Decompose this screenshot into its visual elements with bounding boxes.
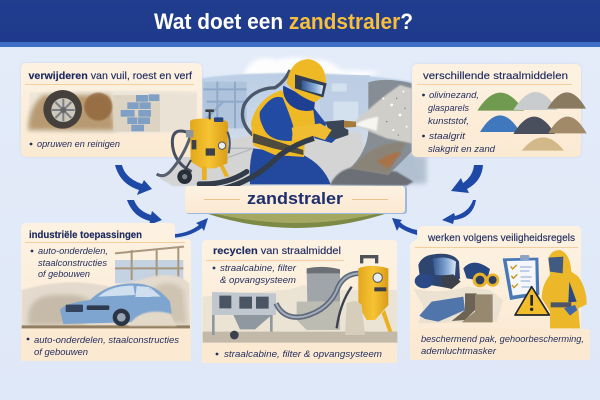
text top: straalcabine, filter <box>220 263 297 274</box>
central scene: worker sandblasting <box>160 57 427 191</box>
title: Wat doet een zandstraler? <box>154 9 413 34</box>
scene backdrop <box>160 57 427 186</box>
arrow: lower left panel to center <box>163 218 208 238</box>
metal sheet and spray <box>330 80 413 186</box>
ear defenders <box>463 263 490 282</box>
panel: recyclen <box>202 240 397 363</box>
illustration: recycling equipment <box>203 257 397 343</box>
list: staalgrit <box>429 131 465 142</box>
full face mask <box>418 254 460 288</box>
list: slakgrit en zand <box>428 144 496 155</box>
boots <box>452 293 477 321</box>
gun <box>325 120 348 139</box>
text bottom: of gebouwen <box>34 347 88 358</box>
glove <box>292 123 332 140</box>
illustration: safety gear <box>413 250 587 328</box>
icon: abrasive piles <box>477 92 587 151</box>
heading: verwijderen van vuil, roest en verf <box>28 70 192 82</box>
text top <box>31 246 108 280</box>
text bottom: ademluchtmasker <box>421 346 497 357</box>
arrow: safety panel to center <box>442 200 476 224</box>
center label: zandstraler: zandstraler <box>247 189 343 208</box>
header banner <box>0 0 600 47</box>
arrow: center to lower left panel <box>127 200 162 225</box>
text bottom <box>421 334 584 357</box>
list: kunststof, <box>428 116 469 127</box>
arrow: right panel to center <box>392 218 417 235</box>
center label: zandstraler <box>185 186 407 228</box>
warning sign <box>515 287 549 315</box>
panel: verschillende straalmiddelen <box>412 64 587 157</box>
worker <box>207 59 356 191</box>
text bottom <box>27 335 179 358</box>
text top: staalconstructies <box>38 258 107 269</box>
legs <box>250 148 331 184</box>
arrow: top right to center <box>451 165 483 193</box>
heading: industriële toepassingen <box>29 229 142 241</box>
list: olivinezand, <box>429 90 479 101</box>
clipboard <box>503 258 539 300</box>
arrow: top left to center <box>115 165 152 195</box>
list <box>422 90 496 155</box>
text bottom: auto-onderdelen, staalconstructies <box>34 335 179 346</box>
heading: verschillende straalmiddelen <box>423 70 568 82</box>
blue back and right arm <box>305 105 337 143</box>
illustration: tire and brick wall <box>27 90 197 133</box>
panel: verwijderen <box>21 63 202 157</box>
heading: werken volgens veiligheidsregels <box>427 232 575 244</box>
text bottom: straalcabine, filter & opvangsysteem <box>224 349 382 360</box>
text top: auto-onderdelen, <box>38 246 108 257</box>
belt <box>253 133 303 155</box>
text top: of gebouwen <box>38 269 90 280</box>
heading: recyclen van straalmiddel <box>213 245 341 257</box>
panel: veiligheidsregels <box>410 226 590 360</box>
text bottom: beschermend pak, gehoorbescherming, <box>421 334 584 345</box>
blast pot machine <box>157 109 247 184</box>
text top <box>213 263 297 286</box>
hood <box>283 86 315 111</box>
hose <box>207 138 314 191</box>
bullet <box>30 143 32 145</box>
gloves <box>419 297 465 322</box>
vest <box>251 90 315 157</box>
list: glasparels <box>428 103 469 114</box>
illustration: car in dust <box>22 247 190 328</box>
panel: verwijderen: opruwen en reinigen <box>37 139 120 150</box>
suit <box>542 250 587 328</box>
shadows <box>413 287 503 323</box>
text top: & opvangsysteem <box>220 275 296 286</box>
panel: industriele toepassingen <box>21 223 191 361</box>
helmet <box>287 59 326 102</box>
air hose from helmet <box>242 70 290 135</box>
